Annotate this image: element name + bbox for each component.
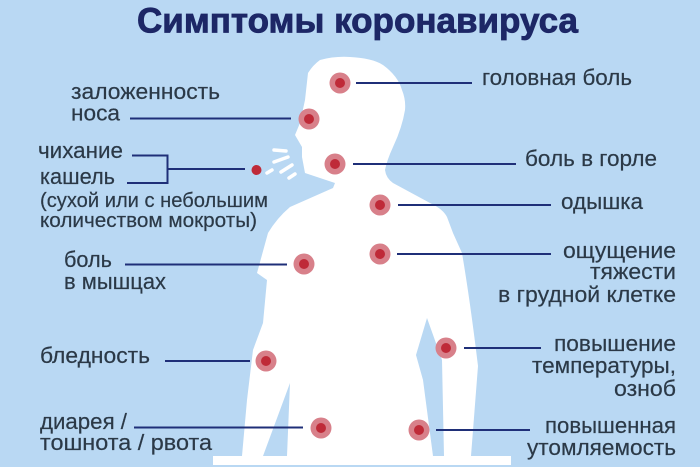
marker: breath <box>370 194 390 216</box>
marker: fatigue <box>408 420 430 440</box>
label: sneezing and cough: (сухой или с небольшим <box>40 190 268 212</box>
label: diarrhea and nausea: тошнота / рвота <box>40 430 212 455</box>
label: chest heaviness: ощущение <box>563 238 676 263</box>
label: fever and chills: повышение <box>554 331 676 356</box>
label: pallor: бледность <box>40 343 150 368</box>
label: shortness of breath: одышка <box>561 189 643 214</box>
marker: nose <box>298 108 320 130</box>
label: fatigue <box>527 413 676 460</box>
label: muscle pain: боль <box>64 247 112 272</box>
label: sneezing and cough: чихание <box>38 138 123 163</box>
connector lines <box>125 83 551 430</box>
label: chest heaviness <box>498 238 676 307</box>
label: headache: головная боль <box>482 65 632 90</box>
marker: throat <box>324 154 346 174</box>
label: fatigue: повышенная <box>545 413 676 438</box>
label: sneezing and cough: количеством мокроты) <box>40 210 257 232</box>
marker: pallor <box>256 350 276 372</box>
marker: head <box>330 72 350 94</box>
marker: temperature <box>436 338 456 358</box>
label: nasal congestion: заложенность <box>71 79 220 104</box>
marker: droplet <box>252 165 262 175</box>
label: fever and chills: температуры, <box>532 353 676 378</box>
label: sore throat: боль в горле <box>525 146 657 171</box>
label: nasal congestion <box>71 79 220 126</box>
label: fever and chills: озноб <box>614 376 676 401</box>
label: muscle pain: в мышцах <box>64 269 167 294</box>
marker: muscles <box>294 254 314 274</box>
label: muscle pain <box>64 247 167 294</box>
label: sneezing and cough <box>38 138 268 232</box>
label: diarrhea and nausea <box>40 409 212 455</box>
breath spray <box>267 150 295 178</box>
label: chest heaviness: в грудной клетке <box>498 282 676 307</box>
label: diarrhea and nausea: диарея / <box>40 409 128 434</box>
label: fever and chills <box>532 331 676 401</box>
human silhouette <box>213 57 511 465</box>
marker: chest <box>370 244 390 264</box>
label: nasal congestion: носа <box>71 100 120 126</box>
label: chest heaviness: тяжести <box>590 259 676 284</box>
label: fatigue: утомляемость <box>527 435 676 460</box>
marker: stomach <box>310 418 332 438</box>
label: sneezing and cough: кашель <box>40 164 115 189</box>
title: Симптомы коронавируса <box>137 2 579 40</box>
